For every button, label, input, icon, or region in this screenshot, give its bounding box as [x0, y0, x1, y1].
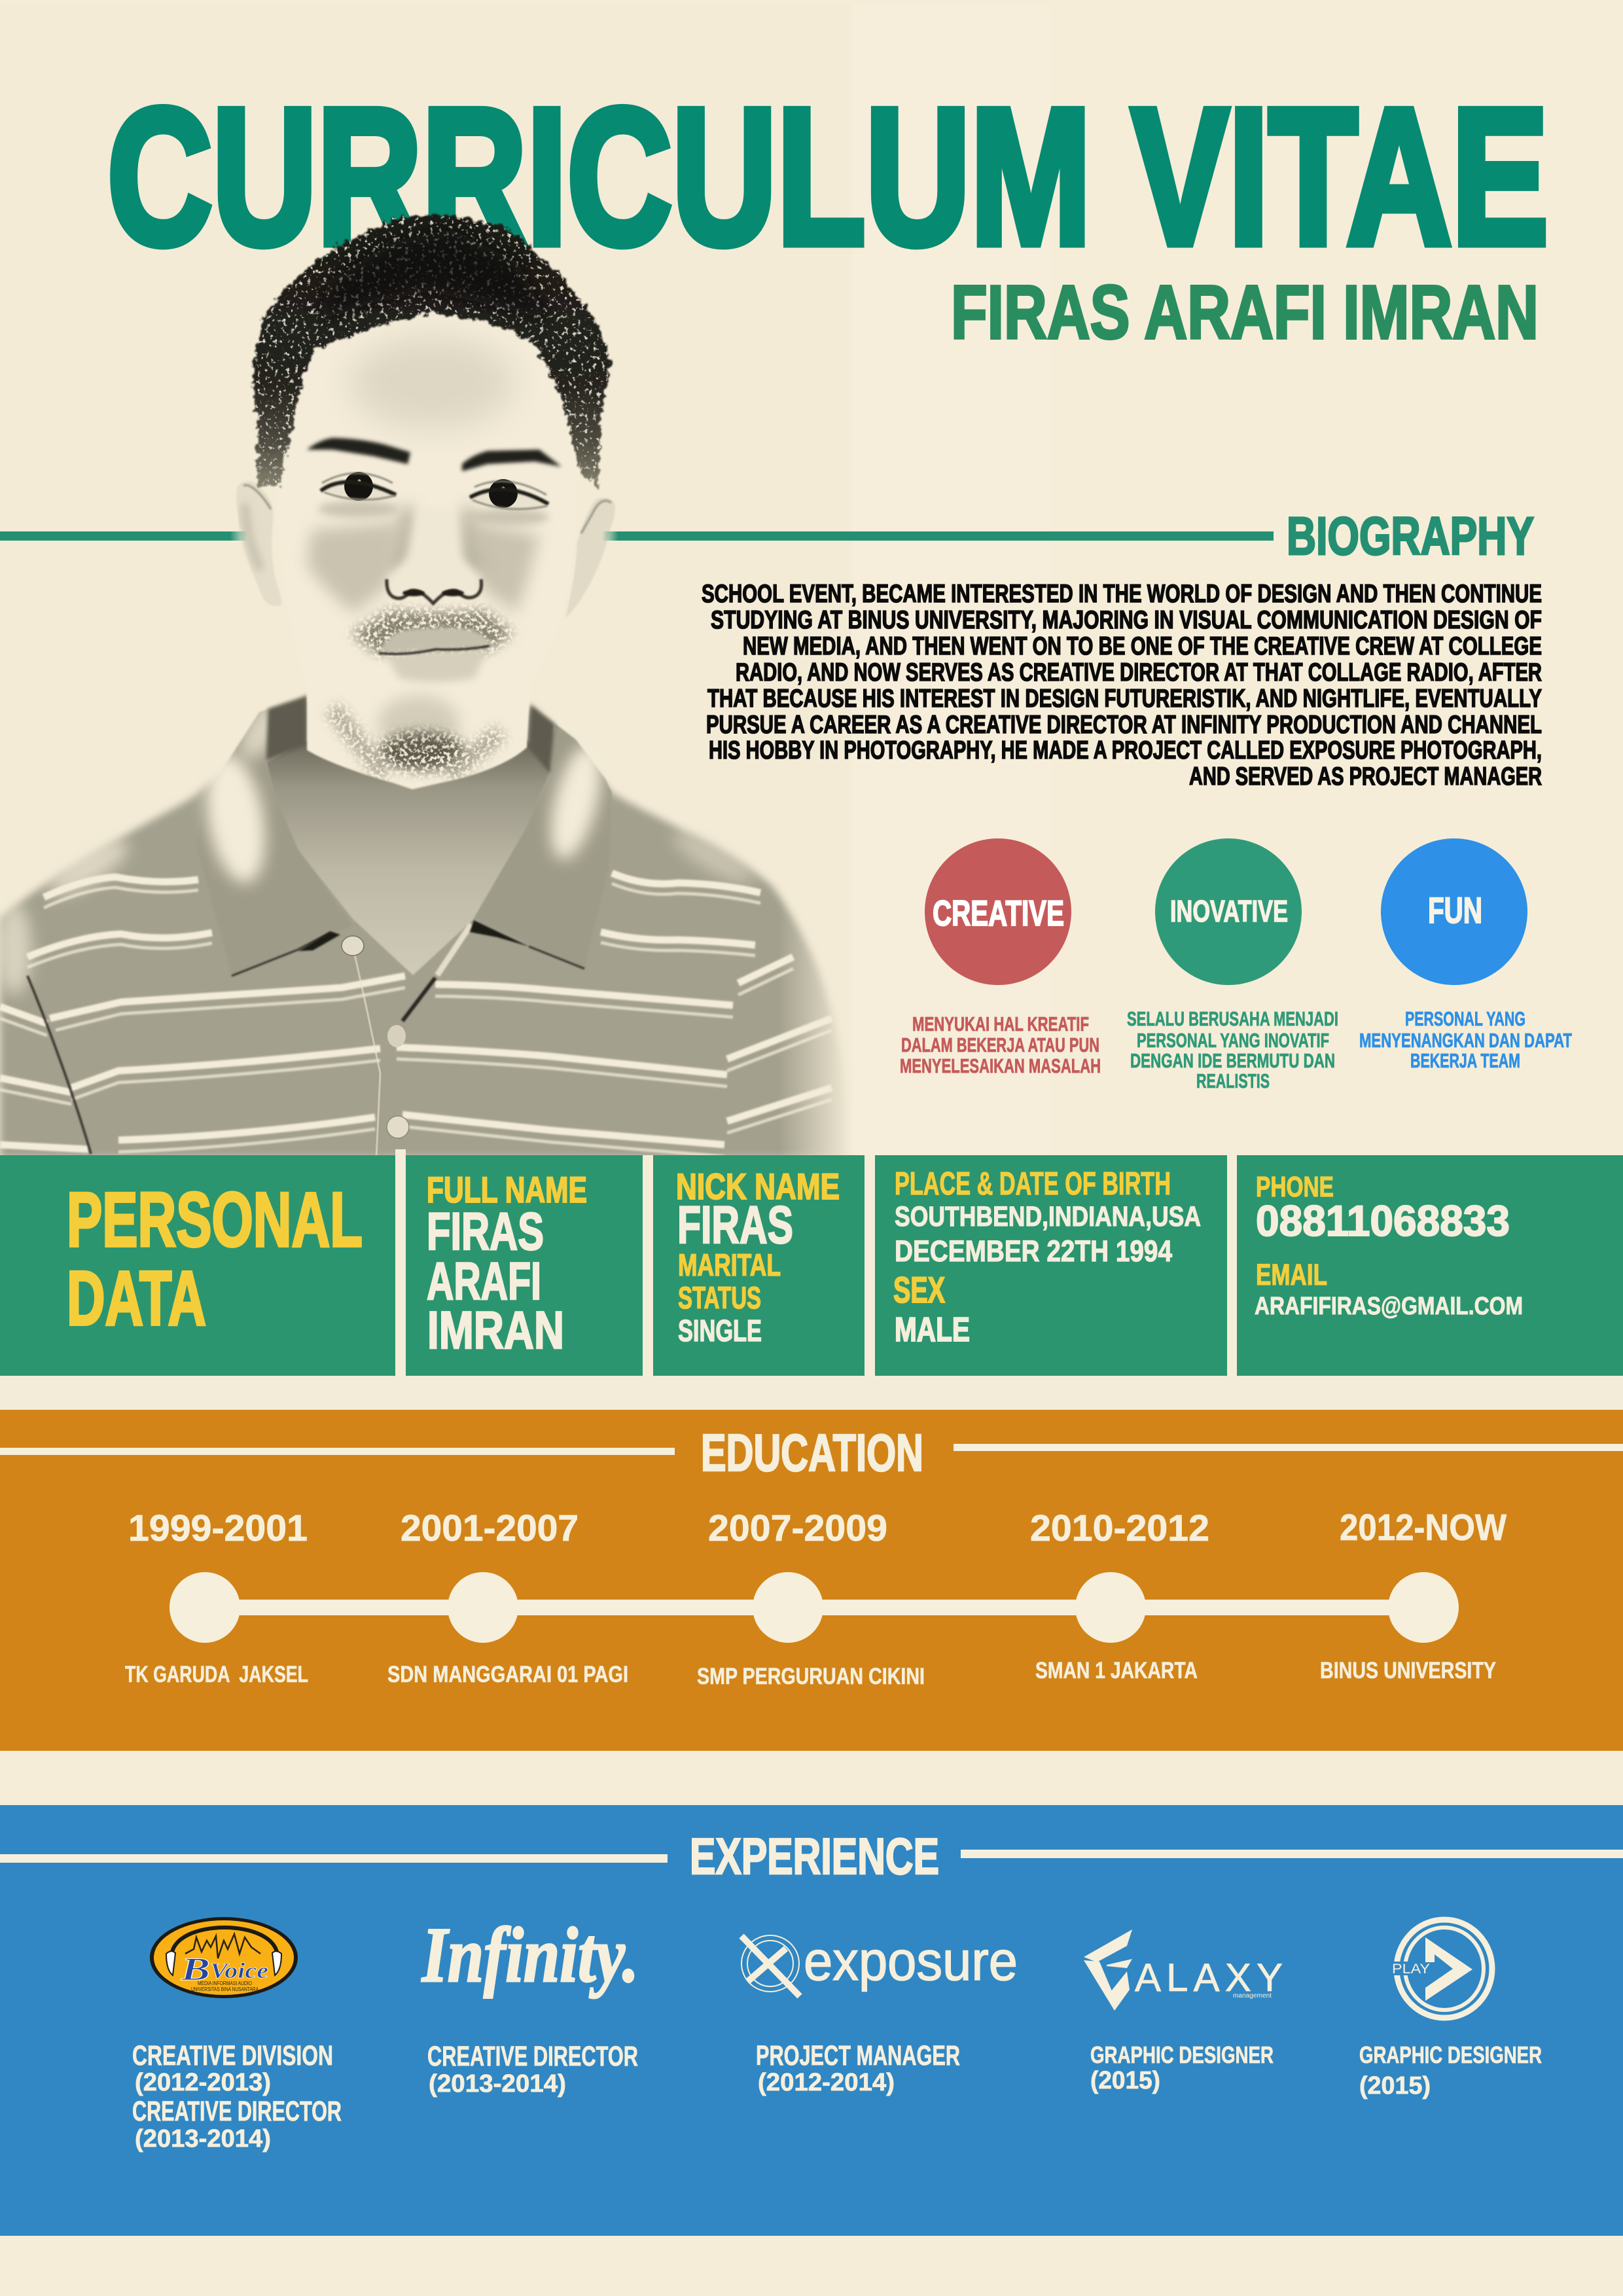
logo: B'Voice	[150, 1917, 298, 1998]
creative description: MENYELESAIKAN MASALAH	[900, 1054, 1101, 1077]
education schools: SDN MANGGARAI 01 PAGI	[387, 1662, 628, 1687]
creative label: CREATIVE	[933, 893, 1064, 933]
education heading: EDUCATION	[701, 1424, 923, 1482]
forehead shading	[350, 337, 514, 429]
personal data heading cell: PERSONAL	[67, 1177, 363, 1263]
inovative description: SELALU BERUSAHA MENJADI	[1127, 1007, 1338, 1030]
mouth	[379, 627, 494, 682]
logo: Play	[1391, 1920, 1492, 2018]
nose sides	[386, 504, 486, 576]
birth and sex cell: SEX	[893, 1269, 945, 1310]
cheek shading	[307, 522, 539, 613]
experience: Play role: GRAPHIC DESIGNER	[1359, 2041, 1542, 2068]
experience: exposure role: (2012-2014)	[758, 2069, 895, 2096]
full name cell	[406, 1155, 643, 1376]
logo: Play: PLAY	[1392, 1962, 1430, 1977]
experience: B'Voice roles: CREATIVE DIRECTOR	[132, 2096, 342, 2127]
neck	[266, 740, 551, 975]
experience: B'Voice roles: (2013-2014)	[135, 2125, 271, 2153]
trait: inovative	[1127, 838, 1338, 1092]
education years: 2007-2009	[708, 1507, 887, 1549]
timeline	[169, 1572, 1459, 1643]
education panel	[0, 1410, 1623, 1751]
nick name and marital status cell: NICK NAME	[676, 1166, 840, 1207]
education years: 2010-2012	[1030, 1507, 1209, 1549]
full name cell: IMRAN	[427, 1301, 564, 1360]
fun description	[1359, 1007, 1572, 1072]
birth and sex cell	[875, 1155, 1227, 1376]
trait: fun	[1359, 838, 1572, 1072]
contact cell: 08811068833	[1256, 1196, 1510, 1245]
experience: Galaxy role	[1090, 2041, 1274, 2094]
creative description: MENYUKAI HAL KREATIF	[912, 1013, 1089, 1035]
fun description: BEKERJA TEAM	[1410, 1049, 1520, 1072]
logo: B'Voice: MEDIA INFORMASI AUDIO	[198, 1981, 252, 1986]
creative description: DALAM BEKERJA ATAU PUN	[901, 1033, 1099, 1056]
trait: creative	[900, 838, 1101, 1077]
logo: B'Voice: Voice	[210, 1959, 268, 1983]
fun circle	[1381, 838, 1527, 985]
nick name and marital status cell: SINGLE	[678, 1314, 762, 1348]
inovative description	[1127, 1007, 1338, 1092]
goatee	[332, 696, 501, 776]
experience rules	[0, 1850, 1623, 1863]
personal data panel	[0, 1149, 1623, 1376]
logo: B'Voice: UNIVERSITAS BINA NUSANTARA	[191, 1986, 259, 1992]
eye-socket shading	[318, 501, 399, 518]
fun label: FUN	[1428, 889, 1482, 931]
nose	[387, 507, 482, 603]
nick name and marital status cell	[653, 1155, 865, 1376]
experience: B'Voice roles: CREATIVE DIVISION	[132, 2040, 333, 2072]
inovative description: REALISTIS	[1196, 1069, 1270, 1092]
experience: Play role	[1359, 2041, 1542, 2100]
experience: Galaxy role: GRAPHIC DESIGNER	[1090, 2041, 1274, 2068]
inovative description: PERSONAL YANG INOVATIF	[1137, 1029, 1329, 1052]
experience heading: EXPERIENCE	[690, 1827, 939, 1885]
logo: exposure	[741, 1930, 1018, 1996]
face	[302, 334, 563, 791]
full name cell: FIRAS	[427, 1202, 544, 1261]
biography text	[702, 580, 1542, 791]
personal data heading cell	[0, 1155, 395, 1376]
placket and buttons	[342, 924, 471, 1158]
inner collar shadow	[266, 696, 555, 773]
nick name and marital status cell: STATUS	[678, 1280, 761, 1315]
education schools: BINUS UNIVERSITY	[1320, 1658, 1496, 1683]
biography rule	[0, 531, 1274, 541]
logo: Infinity: Infinity.	[421, 1911, 639, 1998]
experience panel	[0, 1805, 1623, 2236]
logo: Galaxy	[1084, 1929, 1283, 2011]
gap notch	[395, 1149, 406, 1157]
fun description: PERSONAL YANG	[1405, 1007, 1525, 1030]
full name cell: FULL NAME	[427, 1169, 587, 1210]
experience: B'Voice roles	[132, 2040, 342, 2153]
portrait photo	[0, 214, 852, 1158]
contact cell	[1237, 1155, 1623, 1376]
experience: exposure role: PROJECT MANAGER	[756, 2040, 960, 2072]
experience: Play role: (2015)	[1359, 2072, 1431, 2100]
inovative description: DENGAN IDE BERMUTU DAN	[1130, 1049, 1335, 1072]
inovative label: INOVATIVE	[1170, 894, 1288, 928]
creative description	[900, 1013, 1101, 1077]
education years: 2012-NOW	[1340, 1507, 1507, 1549]
contact cell: PHONE	[1256, 1171, 1334, 1203]
shirt	[0, 697, 852, 1158]
birth and sex cell: SOUTHBEND,INDIANA,USA	[895, 1201, 1201, 1232]
nick name and marital status cell: MARITAL	[678, 1247, 781, 1282]
experience: B'Voice roles: (2012-2013)	[135, 2069, 271, 2096]
full name cell: ARAFI	[427, 1252, 541, 1311]
experience: exposure role	[756, 2040, 960, 2096]
left eye	[321, 472, 396, 501]
experience: Galaxy role: (2015)	[1090, 2067, 1160, 2094]
education schools: SMP PERGURUAN CIKINI	[697, 1664, 925, 1689]
ears	[236, 481, 615, 618]
hair	[253, 214, 611, 488]
right eye	[470, 479, 548, 509]
education schools: SMAN 1 JAKARTA	[1035, 1658, 1198, 1683]
logo: Galaxy: management	[1233, 1992, 1272, 2000]
education years: 1999-2001	[128, 1507, 308, 1549]
education years: 2001-2007	[401, 1507, 579, 1549]
inovative circle	[1155, 838, 1302, 985]
logo: exposure: exposure	[804, 1930, 1018, 1992]
birth and sex cell: PLACE & DATE OF BIRTH	[895, 1166, 1171, 1202]
logo: Galaxy: ALAXY	[1135, 1956, 1283, 2000]
contact cell: EMAIL	[1256, 1258, 1327, 1291]
experience: Infinity role: CREATIVE DIRECTOR	[427, 2041, 638, 2072]
education years	[128, 1507, 1507, 1549]
experience: Infinity role	[427, 2041, 638, 2098]
left eyebrow	[307, 438, 410, 464]
moustache stubble	[351, 610, 514, 654]
creative circle	[925, 838, 1071, 985]
education schools	[125, 1658, 1496, 1689]
education rules	[0, 1444, 1623, 1455]
nick name and marital status cell: FIRAS	[677, 1196, 793, 1255]
contact cell: ARAFIFIRAS@GMAIL.COM	[1255, 1293, 1523, 1320]
experience: Infinity role: (2013-2014)	[429, 2070, 566, 2098]
biography heading: BIOGRAPHY	[1287, 507, 1534, 566]
education schools: TK GARUDA JAKSEL	[125, 1662, 308, 1687]
collar	[196, 694, 612, 976]
right eyebrow	[462, 450, 562, 471]
birth and sex cell: DECEMBER 22TH 1994	[895, 1234, 1172, 1268]
personal data heading cell: DATA	[67, 1255, 206, 1342]
logo: B'Voice: B	[181, 1950, 210, 1987]
birth and sex cell: MALE	[895, 1311, 970, 1349]
